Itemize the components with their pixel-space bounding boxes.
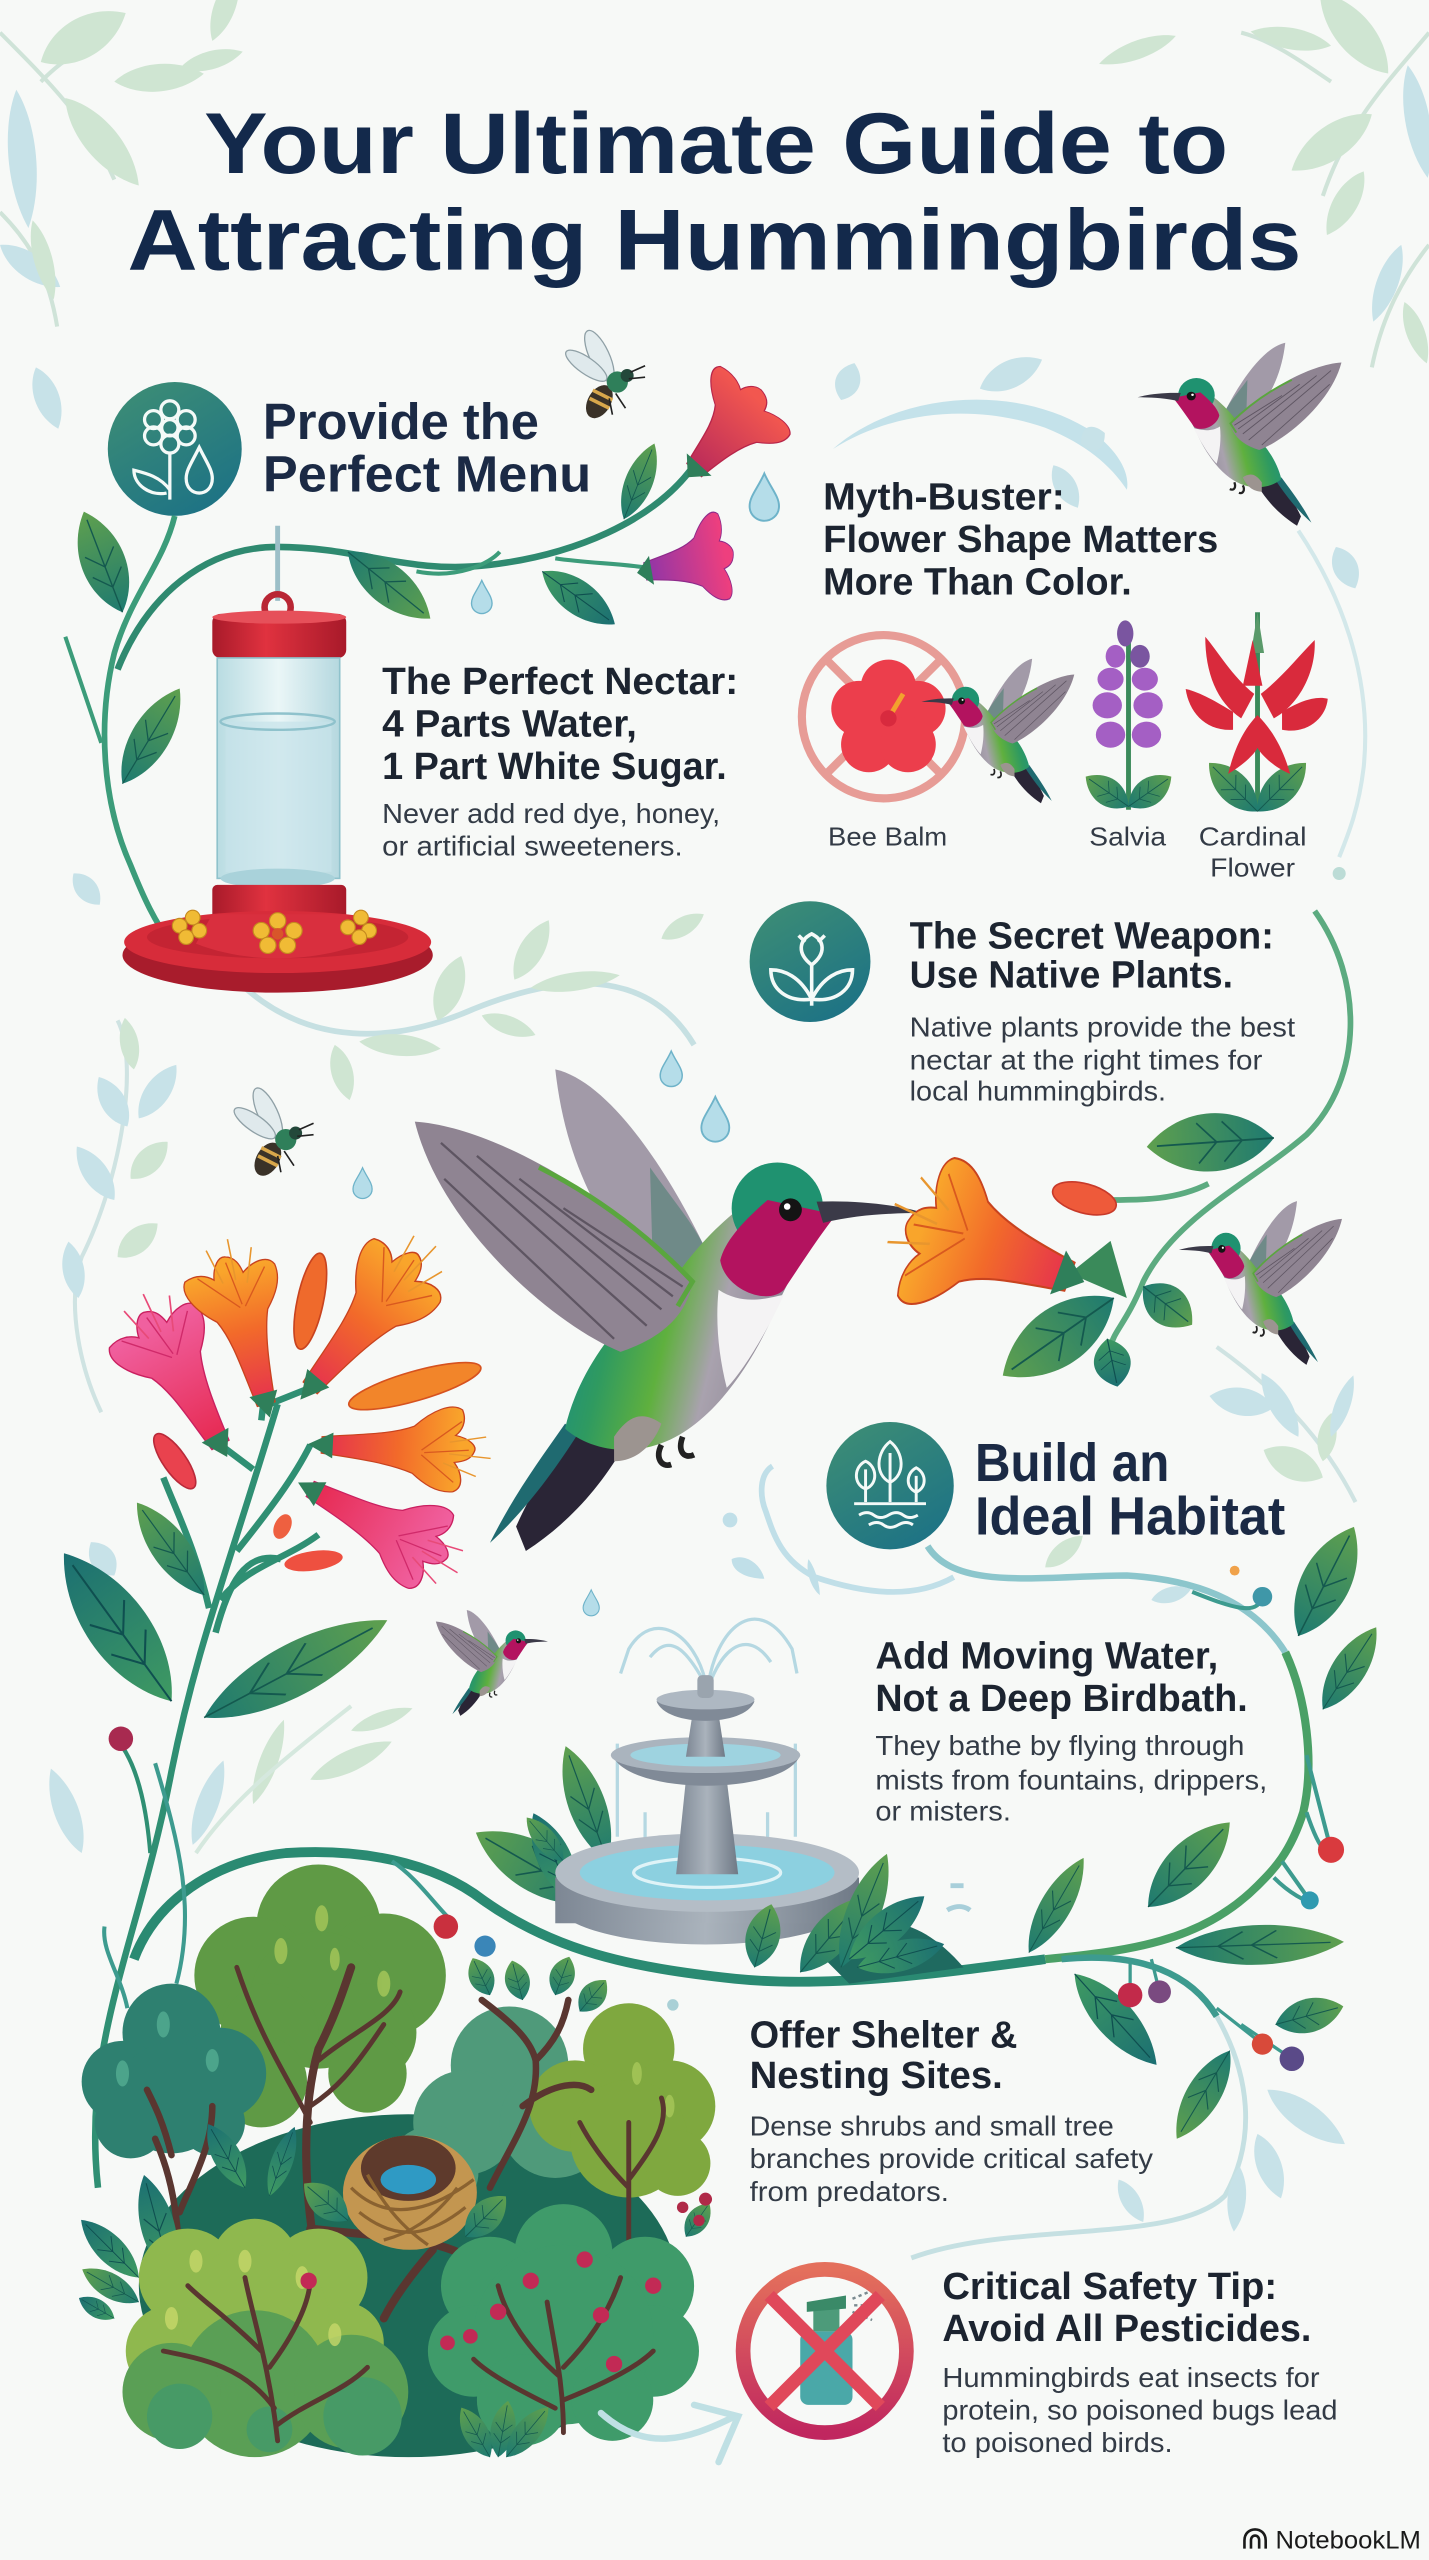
fountain bbox=[464, 1619, 970, 1984]
text: add moving water bbox=[875, 1635, 1267, 1826]
text: the perfect nectar: or artificial sweeteners. bbox=[382, 831, 683, 862]
pale water swoosh, top right bbox=[830, 347, 1366, 880]
icon: water drops near main hummingbird bbox=[353, 1051, 729, 1616]
heading: Provide the Perfect Menu: Provide the bbox=[263, 393, 539, 450]
icon: small droplet bbox=[471, 580, 492, 614]
text: offer shelter and nesting sites: Dense shrubs and small tree bbox=[750, 2111, 1114, 2142]
arrow toward safety tip bbox=[601, 2405, 738, 2462]
crossed out bee balm flower bbox=[802, 635, 965, 798]
text: offer shelter and nesting sites: branches provide critical safety bbox=[750, 2143, 1153, 2174]
pale foliage, left side bbox=[58, 1016, 186, 1645]
plant labels: Bee Balm bbox=[828, 822, 947, 852]
plant labels bbox=[828, 822, 1307, 883]
flower: magenta bell bbox=[629, 510, 741, 614]
text: the secret weapon: The Secret Weapon: bbox=[910, 915, 1274, 957]
text: offer shelter and nesting sites bbox=[750, 2013, 1153, 2207]
text: add moving water: They bathe by flying through bbox=[875, 1730, 1244, 1761]
NotebookLM watermark: NotebookLM bbox=[1275, 2527, 1421, 2555]
text: critical safety tip bbox=[942, 2265, 1338, 2458]
heading: Provide the Perfect Menu bbox=[263, 393, 591, 502]
water swoosh and main vine bbox=[104, 1466, 1390, 2008]
text: add moving water: Not a Deep Birdbath. bbox=[875, 1677, 1248, 1719]
text: critical safety tip: Avoid All Pesticides. bbox=[942, 2307, 1311, 2349]
heading: Build an Ideal Habitat bbox=[975, 1433, 1285, 1547]
icon: habitat circle bbox=[826, 1422, 954, 1549]
text: offer shelter and nesting sites: Nesting Sites. bbox=[750, 2054, 1003, 2096]
nectar feeder bbox=[122, 526, 433, 993]
text: the perfect nectar: 1 Part White Sugar. bbox=[382, 745, 727, 787]
plant labels: Salvia bbox=[1089, 822, 1167, 852]
text: the secret weapon: Use Native Plants. bbox=[910, 954, 1233, 996]
corner foliage: top right bbox=[1096, 0, 1429, 367]
pale foliage, right middle bbox=[1207, 1347, 1361, 1502]
text: critical safety tip: Hummingbirds eat insects for bbox=[942, 2362, 1320, 2393]
text: offer shelter and nesting sites: Offer Shelter & bbox=[750, 2013, 1017, 2055]
title bbox=[127, 96, 1302, 288]
text: the secret weapon: nectar at the right times for bbox=[910, 1044, 1262, 1075]
text: add moving water: Add Moving Water, bbox=[875, 1635, 1218, 1677]
text: add moving water: or misters. bbox=[875, 1795, 1011, 1826]
main hummingbird bbox=[415, 1069, 924, 1551]
icon: no pesticide sign bbox=[743, 2269, 906, 2433]
text: the perfect nectar: The Perfect Nectar: bbox=[382, 660, 738, 702]
vine with leaves above feeder bbox=[63, 438, 694, 944]
icon: water drop bbox=[750, 473, 779, 521]
text: critical safety tip: protein, so poisoned bugs lead bbox=[942, 2395, 1338, 2426]
icon: small hummingbird, right bbox=[1179, 1201, 1342, 1365]
icon: hummingbird at bee balm bbox=[921, 659, 1074, 803]
title: Your Ultimate Guide to bbox=[204, 96, 1228, 192]
icon: flower and drop circle bbox=[108, 382, 242, 516]
text: add moving water: mists from fountains, drippers, bbox=[875, 1764, 1267, 1795]
text: the perfect nectar: 4 Parts Water, bbox=[382, 702, 637, 744]
icon: small hummingbird, lower bbox=[436, 1610, 548, 1716]
icon: bee, left bbox=[230, 1084, 314, 1180]
text: critical safety tip: to poisoned birds. bbox=[942, 2427, 1173, 2458]
text: the secret weapon bbox=[910, 915, 1295, 1106]
plant labels: Cardinal bbox=[1199, 822, 1307, 852]
flower: salvia bbox=[1078, 620, 1179, 818]
text: myth-buster bbox=[823, 475, 1218, 602]
text: the perfect nectar bbox=[382, 660, 738, 862]
title: Attracting Hummingbirds bbox=[127, 192, 1302, 288]
right vine leaves and berries bbox=[434, 1755, 1353, 2258]
flower: cardinal flower bbox=[1186, 612, 1328, 822]
pale foliage, lower left bbox=[39, 1701, 415, 1857]
icon: native plant circle bbox=[750, 901, 870, 1022]
bird nest bbox=[343, 2136, 477, 2250]
text: the secret weapon: local hummingbirds. bbox=[910, 1075, 1166, 1106]
text: the perfect nectar: Never add red dye, honey, bbox=[382, 798, 720, 829]
flowering vine, right bbox=[864, 911, 1350, 1400]
heading: Build an Ideal Habitat: Build an bbox=[975, 1433, 1169, 1493]
corner foliage: top left bbox=[0, 0, 248, 433]
text: myth-buster: More Than Color. bbox=[823, 560, 1132, 602]
garden of trees and shrubs with nest bbox=[71, 1864, 718, 2465]
text: myth-buster: Flower Shape Matters bbox=[823, 518, 1218, 560]
flowering plant, left bbox=[39, 1211, 493, 2188]
pale vine under feeder bbox=[65, 867, 708, 1103]
heading: Provide the Perfect Menu: Perfect Menu bbox=[263, 445, 591, 502]
text: myth-buster: Myth-Buster: bbox=[823, 475, 1065, 517]
icon: bee bbox=[562, 327, 645, 423]
icon: hummingbird, top right bbox=[1138, 343, 1341, 526]
flower: red bell bbox=[649, 357, 799, 509]
text: offer shelter and nesting sites: from predators. bbox=[750, 2176, 949, 2207]
plant labels: Flower bbox=[1210, 853, 1295, 883]
text: critical safety tip: Critical Safety Tip: bbox=[942, 2265, 1277, 2307]
heading: Build an Ideal Habitat: Ideal Habitat bbox=[975, 1487, 1285, 1547]
text: the secret weapon: Native plants provide the best bbox=[910, 1012, 1295, 1043]
